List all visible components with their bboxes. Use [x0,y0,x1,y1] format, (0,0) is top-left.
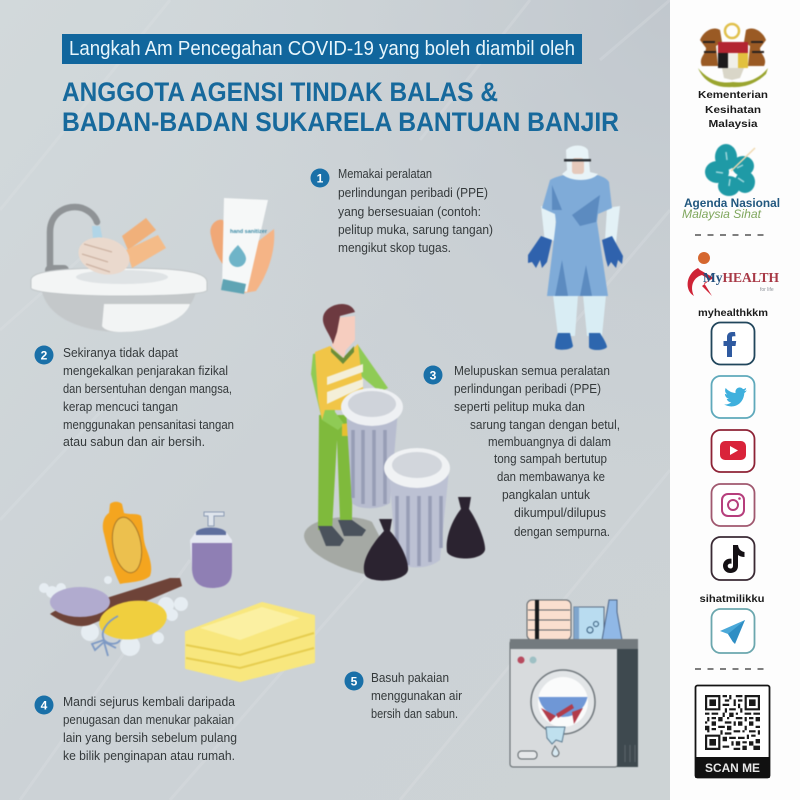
logo text: Agenda Nasional: Agenda Nasional [684,198,780,210]
step 2 text: mengekalkan penjarakan fizikal [63,363,228,378]
icon: youtube [712,430,754,472]
step 1 text: perlindungan peribadi (PPE) [338,185,488,200]
step 3 text: dengan sempurna. [514,524,610,539]
icon: faucet [50,207,97,272]
icon: facebook [712,322,754,364]
icon: foamy hands [74,232,134,280]
icon: detergent box [574,607,604,640]
step 3 text: Melupuskan semua peralatan [454,363,610,378]
icon: orange shampoo bottle [103,502,151,584]
step 1 text: Memakai peralatan [338,166,432,181]
step 5 text: menggunakan air [371,688,463,703]
step 3 text [454,363,620,539]
icon: trash bag left [364,519,408,581]
badge 4: 4 [41,698,48,712]
illustration: washing hands at sink [31,207,207,332]
step 5 text: bersih dan sabun. [371,706,458,721]
step 1 text: mengikut skop tugas. [338,240,451,255]
step 1 text: pelitup muka, sarung tangan) [338,222,493,237]
banner heading: Langkah Am Pencegahan COVID-19 yang boleh diambil oleh [69,37,575,60]
step 1 text: yang bersesuaian (contoh: [338,204,481,219]
badge 3: 3 [430,368,437,382]
icon: string [92,616,120,656]
step 2 text: kerap mencuci tangan [63,399,178,414]
QR code: SCAN ME [705,761,760,775]
step 3 text: perlindungan peribadi (PPE) [454,381,601,396]
step 2 text [63,345,234,449]
badge 4 [34,696,54,714]
illustration: worker with bins [304,304,485,581]
step 2 text: menggunakan pensanitasi tangan [63,417,234,432]
icon: worker [311,304,388,546]
label: myhealthkkm: myhealthkkm [698,307,768,319]
icon: detergent bottle [602,600,622,640]
icon: machine body [510,640,618,767]
icon: shoes [555,333,607,350]
icon: arms [122,218,166,268]
step 4 text: Mandi sejurus kembali daripada [63,694,236,709]
step 4 text: ke bilik penginapan atau rumah. [63,748,235,763]
icon: purple soap pump [190,512,232,588]
illustration: sanitizer tube in hand: hand sanitizer [230,229,268,235]
step 2 text: dan bersentuhan dengan mangsa, [63,381,232,396]
logo text: Agenda Nasional [682,198,780,221]
logo text: Agenda Nasional: Malaysia Sihat [682,209,762,221]
icon: gloves [528,236,552,268]
badge 3 [424,366,442,384]
ministry name: Kesihatan [705,104,761,116]
badge 1: 1 [317,172,324,186]
icon: door with water [531,670,595,757]
ministry name [698,89,768,130]
icon: front bin [384,448,450,568]
sidebar panel [670,0,800,800]
icon: gown [542,174,612,296]
step 2 text: Sekiranya tidak dapat [63,345,178,360]
badge 1 [310,168,330,188]
illustration: sanitizer tube in hand [210,198,274,294]
icon: legs [553,295,606,336]
icon: hood and mask [562,146,598,180]
label: sihatmilikku: sihatmilikku [700,593,764,605]
badge 2: 2 [41,348,48,362]
ministry name: Malaysia [708,118,758,130]
title: ANGGOTA AGENSI TINDAK BALAS & [62,77,498,107]
icon: bubbles [39,576,188,656]
icon: telegram [712,609,754,653]
step 2 text: atau sabun dan air bersih. [63,434,205,449]
illustration: washing machine [510,600,638,767]
title: BADAN-BADAN SUKARELA BANTUAN BANJIR [62,107,619,137]
icon: sleeves [541,206,620,243]
icon: basin [31,268,207,332]
step 4 text: lain yang bersih sebelum pulang [63,730,237,745]
step 4 text: penugasan dan menukar pakaian [63,712,234,727]
icon: yellow sponge [97,596,169,644]
step 3 text: membuangnya di dalam [488,434,611,449]
illustration: bath items [39,502,314,681]
badge 5: 5 [351,674,358,688]
title [62,77,619,137]
icon: rear bin [341,388,403,508]
step 3 text: tong sampah bertutup [494,451,607,466]
icon: instagram [712,484,754,526]
icon: bath brush [50,578,182,626]
step 3 text: dan membawanya ke [497,469,605,484]
step 3 text: pangkalan untuk [502,487,590,502]
logo: hibiscus [705,144,755,196]
logo: MyHEALTH [688,252,779,296]
step 5 text [371,670,463,721]
step 1 text [338,166,493,255]
step 4 text [63,694,237,763]
badge 5 [344,672,364,690]
illustration: PPE suit [528,146,623,350]
step 3 text: sarung tangan dengan betul, [470,417,620,432]
icon: folded towels [186,603,314,681]
logo: MyHEALTH: for life [760,287,774,293]
icon: twitter [712,376,754,418]
logo: MyHEALTH: MyHEALTH [703,271,779,286]
icon: stacked towels [527,600,571,640]
badge 2 [34,346,54,364]
icon: ground shadow [304,517,400,577]
step 3 text: dikumpul/dilupus [514,505,606,520]
step 3 text: seperti pelitup muka dan [454,399,585,414]
icon: tiktok [712,537,754,580]
icon: trash bag right [447,497,485,559]
logo: coat of arms [698,24,768,87]
QR code [695,686,770,778]
ministry name: Kementerian [698,89,768,101]
step 5 text: Basuh pakaian [371,670,449,685]
